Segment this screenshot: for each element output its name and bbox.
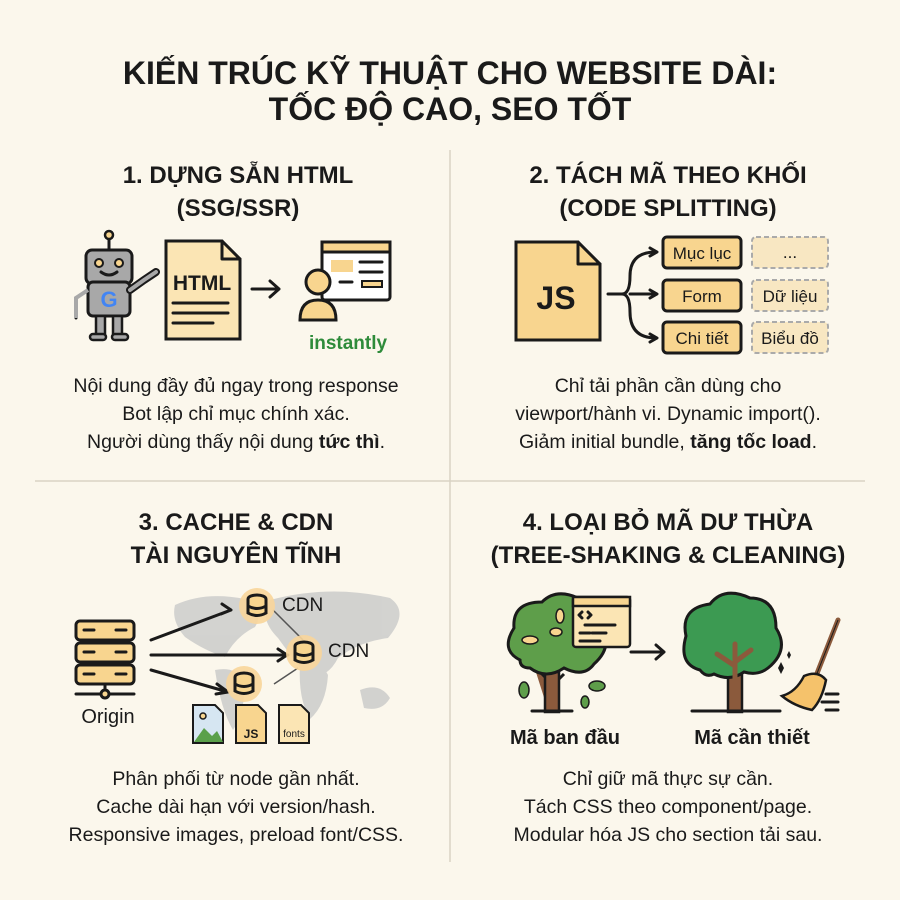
title: TỐC ĐỘ CAO, SEO TỐT — [269, 91, 632, 127]
panel: tree-shaking: Mã cần thiết — [694, 727, 810, 749]
heading 2: (CODE SPLITTING) — [559, 195, 777, 222]
arrow — [252, 281, 279, 297]
icon: robot — [76, 231, 156, 340]
icon: HTML file — [166, 241, 240, 339]
heading 1 — [123, 161, 353, 222]
text block 3: Cache dài hạn với version/hash. — [96, 796, 376, 818]
heading 1: (SSG/SSR) — [177, 195, 299, 222]
CDN nodes — [226, 588, 369, 702]
heading 2: 2. TÁCH MÃ THEO KHỐI — [529, 161, 807, 189]
icon: HTML file: HTML — [173, 272, 231, 295]
CDN nodes: CDN — [282, 595, 323, 616]
world map — [174, 591, 400, 730]
text block 4 — [514, 768, 822, 846]
module boxes: Biểu đồ — [761, 329, 819, 348]
heading 3: 3. CACHE & CDN — [139, 509, 333, 536]
module boxes: Dữ liệu — [763, 287, 817, 306]
text block 4: Modular hóa JS cho section tải sau. — [514, 824, 822, 846]
text block 4: Tách CSS theo component/page. — [524, 796, 812, 818]
icon: broom — [778, 620, 838, 710]
panel: tree-shaking — [491, 507, 845, 846]
text block 3: Responsive images, preload font/CSS. — [69, 824, 403, 846]
heading 3 — [131, 509, 341, 569]
icon: robot: G — [100, 287, 118, 312]
heading 1: 1. DỰNG SẴN HTML — [123, 161, 353, 189]
text block 2: viewport/hành vi. Dynamic import(). — [515, 403, 821, 425]
panel: code splitting — [515, 161, 828, 453]
arrows: branches — [608, 248, 657, 342]
text block 3: Phân phối từ node gần nhất. — [112, 768, 360, 790]
module boxes: ... — [783, 243, 797, 262]
text block 2: Giảm initial bundle, tăng tốc load. — [519, 431, 817, 453]
panel: cache & CDN — [69, 509, 403, 846]
label: instantly: instantly — [309, 333, 387, 354]
text block 1: Nội dung đầy đủ ngay trong response — [73, 375, 399, 397]
icon: clean tree — [684, 593, 781, 712]
text block 3 — [69, 768, 403, 846]
heading 4: (TREE-SHAKING & CLEANING) — [491, 542, 845, 569]
arrows to CDN — [151, 604, 288, 694]
asset file icons: fonts — [283, 729, 305, 740]
heading 4: 4. LOẠI BỎ MÃ DƯ THỪA — [523, 507, 813, 536]
icon: JS file: JS — [536, 280, 576, 316]
CDN nodes: CDN — [328, 641, 369, 662]
heading 2 — [529, 161, 807, 222]
panel: SSG/SSR — [73, 161, 399, 453]
icon: messy tree — [508, 594, 630, 712]
arrow — [631, 645, 664, 659]
icon: JS file — [516, 242, 600, 340]
text block 2: Chỉ tải phần cần dùng cho — [555, 375, 781, 397]
module boxes — [663, 237, 828, 353]
title — [123, 55, 777, 127]
text block 2 — [515, 375, 821, 453]
asset file icons — [193, 705, 309, 743]
text block 1: Bot lập chỉ mục chính xác. — [122, 403, 350, 425]
text block 1: Người dùng thấy nội dung tức thì. — [87, 431, 385, 453]
icon: user with browser — [300, 242, 390, 320]
heading 3: TÀI NGUYÊN TĨNH — [131, 541, 341, 569]
asset file icons: JS — [244, 727, 258, 741]
module boxes: Form — [682, 287, 722, 306]
text block 4: Chỉ giữ mã thực sự cần. — [563, 768, 773, 790]
module boxes: Mục lục — [673, 244, 732, 263]
module boxes: Chi tiết — [676, 329, 729, 348]
heading 4 — [491, 507, 845, 569]
title: KIẾN TRÚC KỸ THUẬT CHO WEBSITE DÀI: — [123, 55, 777, 91]
icon: origin server: Origin — [81, 706, 135, 728]
icon: origin server — [76, 621, 135, 728]
labels: Mã ban đầu — [510, 727, 620, 749]
text block 1 — [73, 375, 399, 453]
